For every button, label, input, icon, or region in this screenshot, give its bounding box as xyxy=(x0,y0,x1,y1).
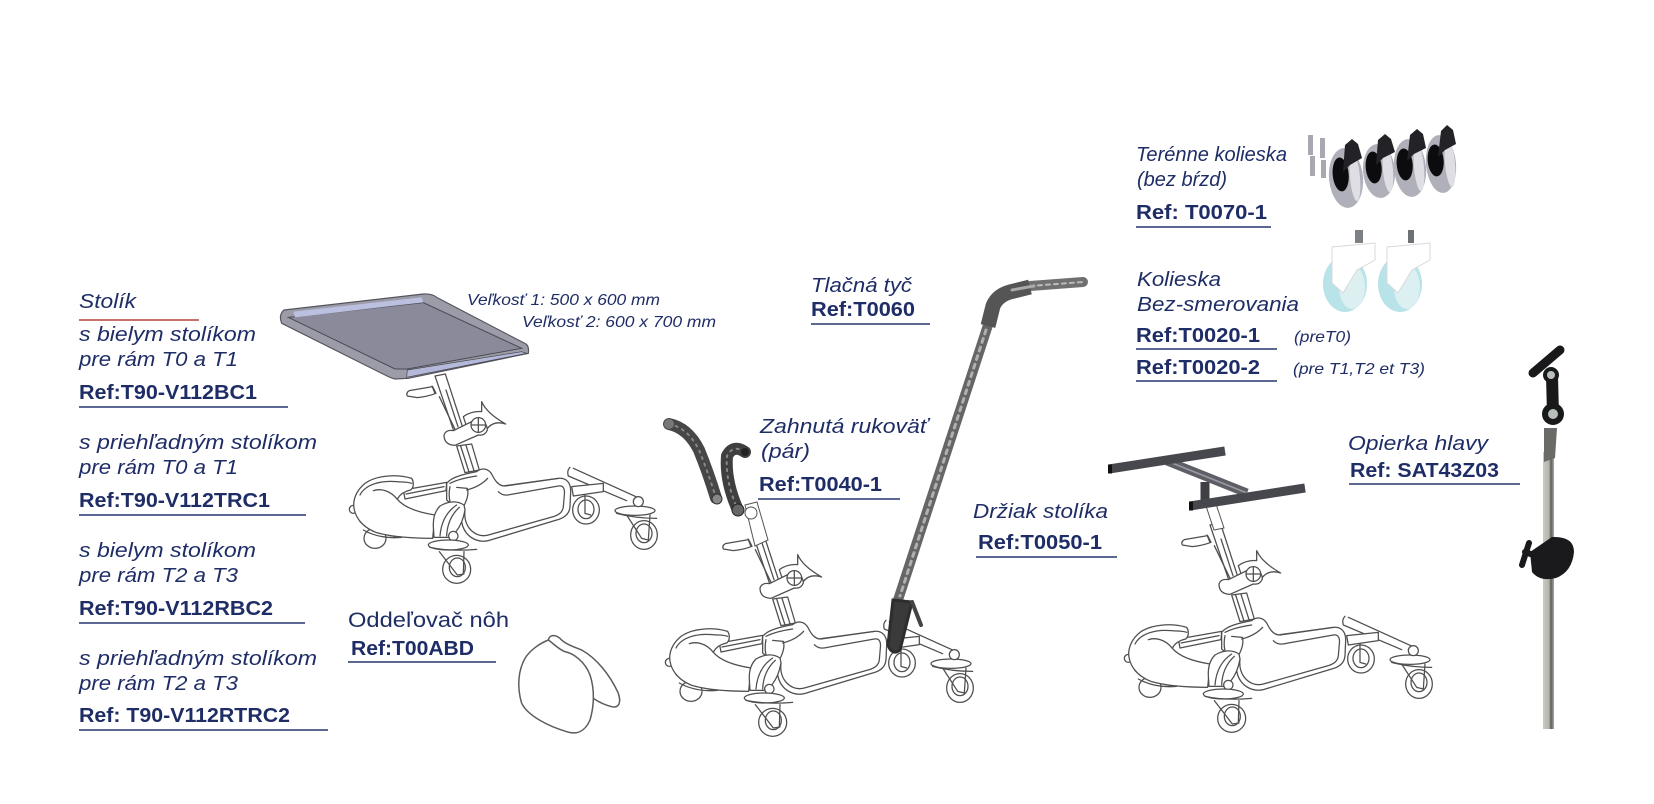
label: non-directional casters: Ref:T0020-2 xyxy=(1136,357,1260,379)
label: headrest xyxy=(1348,432,1520,484)
label: non-directional casters: Ref:T0020-1 xyxy=(1136,325,1260,347)
option 1 xyxy=(78,323,288,407)
label: curved handle xyxy=(758,415,931,499)
option 2: Ref:T90-V112TRC1 xyxy=(79,490,270,512)
option 3 xyxy=(78,539,305,623)
walker base xyxy=(1124,523,1432,732)
push bar xyxy=(888,282,1083,652)
label: non-directional casters: (preT0) xyxy=(1294,329,1351,346)
clear casters xyxy=(1323,230,1430,312)
option 4: s priehľadným stolíkom xyxy=(79,647,317,670)
tray sizes: Veľkosť 2: 600 x 700 mm xyxy=(522,314,716,331)
label: headrest: Opierka hlavy xyxy=(1348,432,1490,455)
option 2 xyxy=(78,431,317,515)
column extension xyxy=(745,502,768,546)
option 3: s bielym stolíkom xyxy=(79,539,256,562)
option 3: Ref:T90-V112RBC2 xyxy=(79,598,273,620)
label: non-directional casters xyxy=(1136,268,1425,381)
label: leg separator xyxy=(348,609,509,662)
label: terrain casters xyxy=(1136,143,1287,227)
walker base xyxy=(665,527,973,736)
panel: table options xyxy=(78,290,328,730)
label: tray holder: Ref:T0050-1 xyxy=(978,532,1102,554)
label: push bar xyxy=(811,274,930,324)
option 1: Ref:T90-V112BC1 xyxy=(79,382,257,404)
column extension xyxy=(1206,504,1224,530)
label: curved handle: (pár) xyxy=(761,440,810,463)
walker base xyxy=(349,374,657,583)
walker with tray holder xyxy=(1109,451,1432,732)
tray sizes xyxy=(467,292,716,331)
tray tabletop xyxy=(280,294,529,379)
option 4: pre rám T2 a T3 xyxy=(78,672,239,695)
option 4 xyxy=(78,647,328,730)
screws xyxy=(1308,135,1326,178)
label: curved handle: Zahnutá rukoväť xyxy=(759,415,931,438)
heading: Stolík xyxy=(79,290,199,320)
label: push bar: Tlačná tyč xyxy=(811,274,913,297)
walker with curved handles xyxy=(664,419,973,736)
caster right xyxy=(1378,230,1430,312)
headrest support xyxy=(1522,350,1574,729)
label: curved handle: Ref:T0040-1 xyxy=(759,474,882,496)
label: leg separator: Oddeľovač nôh xyxy=(348,609,509,632)
tray holder bars xyxy=(1109,451,1305,510)
label: leg separator: Ref:T00ABD xyxy=(351,638,474,660)
label: terrain casters: Terénne kolieska xyxy=(1136,143,1287,166)
label: terrain casters: Ref: T0070-1 xyxy=(1136,202,1267,224)
label: push bar: Ref:T0060 xyxy=(811,299,915,321)
option 2: s priehľadným stolíkom xyxy=(79,431,317,454)
walker with tray xyxy=(280,294,657,583)
label: non-directional casters: Kolieska xyxy=(1137,268,1221,291)
label: headrest: Ref: SAT43Z03 xyxy=(1350,460,1499,482)
option 4: Ref: T90-V112RTRC2 xyxy=(79,705,290,727)
icon: curved handles xyxy=(664,419,757,519)
terrain casters xyxy=(1308,125,1458,209)
label: tray holder xyxy=(973,500,1117,557)
option 1: s bielym stolíkom xyxy=(79,323,256,346)
option 2: pre rám T0 a T1 xyxy=(78,456,238,479)
option 3: pre rám T2 a T3 xyxy=(78,564,239,587)
caster left xyxy=(1323,230,1375,312)
leg separator xyxy=(519,636,620,733)
label: non-directional casters: Bez-smerovania xyxy=(1137,293,1299,316)
heading: Stolík: Stolík xyxy=(79,290,138,313)
tray sizes: Veľkosť 1: 500 x 600 mm xyxy=(467,292,660,309)
option 1: pre rám T0 a T1 xyxy=(78,348,238,371)
wheels xyxy=(1326,125,1458,209)
label: non-directional casters: (pre T1,T2 et T3) xyxy=(1293,361,1425,378)
label: tray holder: Držiak stolíka xyxy=(973,500,1108,523)
label: terrain casters: (bez bŕzd) xyxy=(1137,168,1227,191)
